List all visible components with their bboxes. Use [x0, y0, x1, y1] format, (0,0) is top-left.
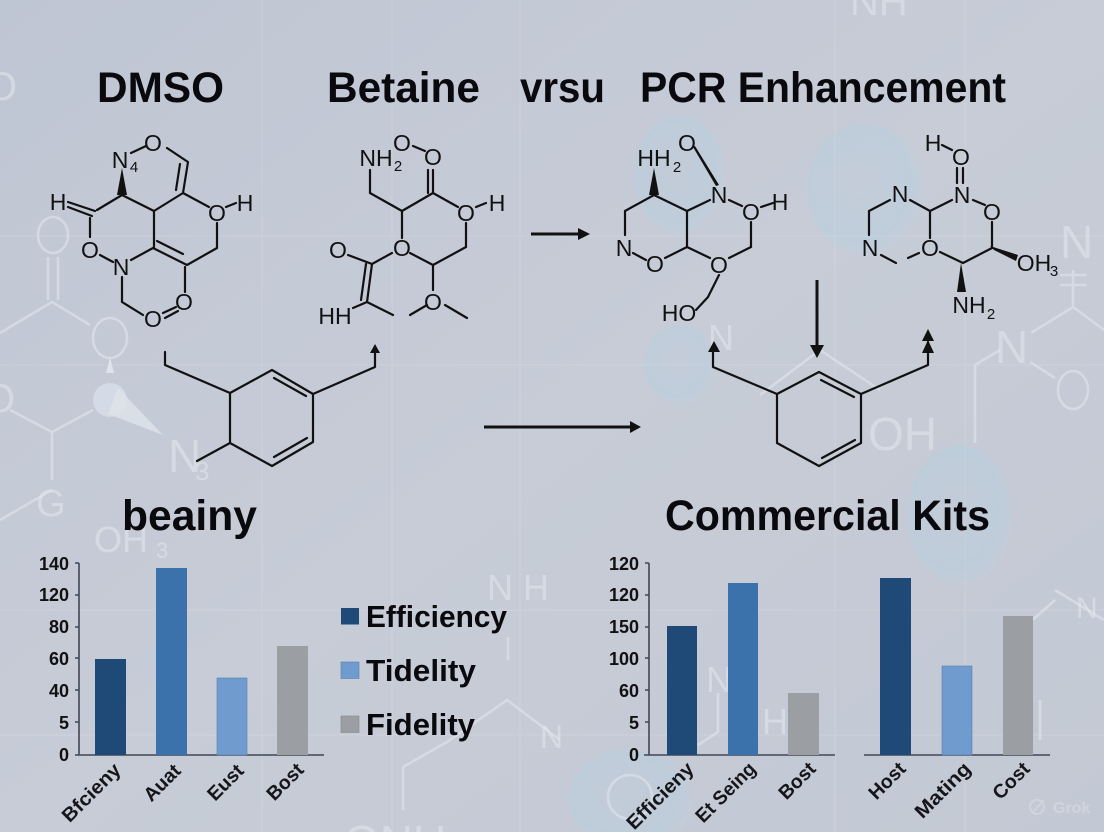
molecule: PCR structure left: N	[711, 182, 727, 208]
molecule: Betaine structure: H	[489, 190, 505, 216]
molecule: DMSO structure: O	[144, 306, 162, 332]
bar chart: beainy: 5	[59, 713, 69, 733]
molecule: PCR structure right: N	[954, 182, 970, 208]
molecule: Betaine structure: O	[393, 235, 411, 261]
background molecular motifs: OH	[868, 408, 937, 460]
bar chart: Commercial Kits left: 100	[609, 649, 639, 669]
bar chart: Commercial Kits left: 120	[609, 585, 639, 605]
bar chart: Commercial Kits right: Mating	[910, 758, 976, 823]
heading: Commercial Kits: Commercial Kits	[665, 492, 990, 540]
arrow: DMSO ring to Betaine	[165, 344, 380, 466]
molecule: PCR structure left: HH	[637, 145, 671, 171]
background molecular motifs: N	[995, 321, 1028, 373]
molecule: Betaine structure: 2	[394, 158, 402, 175]
background molecular motifs: H	[762, 701, 788, 742]
molecule: PCR structure right: O	[952, 144, 970, 170]
bar chart: beainy: 80	[49, 617, 69, 637]
molecule: PCR structure right: NH	[952, 292, 986, 318]
molecule: DMSO structure: O	[208, 200, 226, 226]
molecule: Betaine structure: NH	[359, 145, 393, 171]
molecule: PCR structure right: O	[983, 199, 1001, 225]
molecule: Betaine structure: O	[424, 289, 442, 315]
watermark: Grok	[1030, 800, 1090, 817]
molecule: Betaine structure: O	[393, 130, 411, 156]
background molecular motifs: 3	[156, 538, 168, 563]
bar chart: Commercial Kits left: Et Seing	[691, 758, 761, 827]
molecule: PCR structure left: O	[678, 130, 696, 156]
bar chart: Commercial Kits left: 120	[609, 554, 639, 574]
bar chart: beainy: 140	[39, 554, 69, 574]
molecule: PCR structure right: N	[862, 235, 878, 261]
heading: beainy: beainy	[122, 492, 257, 540]
background molecular motifs: N	[1060, 216, 1093, 268]
legend: Efficiency	[366, 599, 508, 634]
molecule: DMSO structure: 4	[130, 159, 138, 176]
arrow: reaction middle	[484, 421, 641, 433]
molecule: PCR structure right: OH	[1017, 250, 1051, 276]
background molecular motifs: N	[708, 317, 734, 358]
bar chart: beainy: Eust	[203, 760, 249, 805]
bar chart: beainy: Bost	[262, 759, 309, 805]
molecule: PCR structure left: 2	[673, 159, 681, 176]
molecule: DMSO structure: H	[237, 190, 253, 216]
molecule: DMSO structure: O	[144, 130, 162, 156]
molecule: Betaine structure: O	[457, 200, 475, 226]
molecule: DMSO structure	[50, 130, 253, 332]
molecule: Betaine structure: O	[424, 144, 442, 170]
bar chart: Commercial Kits right	[864, 578, 1050, 823]
background molecular motifs: OH	[94, 519, 148, 560]
molecule: PCR structure right: 3	[1050, 263, 1058, 280]
molecule: PCR structure left: O	[742, 199, 760, 225]
molecule: PCR structure left	[616, 130, 788, 326]
molecule: PCR structure right: O	[921, 235, 939, 261]
bar chart: Commercial Kits left	[609, 554, 835, 832]
molecule: PCR structure right: 2	[987, 306, 995, 323]
legend: Fidelity	[366, 707, 476, 742]
bar chart: Commercial Kits left: 0	[629, 745, 639, 765]
watermark: Grok: Grok	[1053, 800, 1090, 817]
molecule: Betaine structure: HH	[318, 303, 352, 329]
molecule: PCR structure left: H	[772, 189, 788, 215]
bar chart: Commercial Kits right: Cost	[988, 758, 1035, 804]
molecule: DMSO structure: H	[50, 189, 66, 215]
molecule: DMSO structure: N	[113, 254, 129, 280]
bar chart: Commercial Kits left: 5	[629, 713, 639, 733]
background molecular motifs: N	[168, 430, 201, 482]
molecule: PCR structure left: O	[646, 251, 664, 277]
bar chart: beainy: 60	[49, 649, 69, 669]
bar chart: Commercial Kits left: Bost	[774, 758, 821, 804]
molecule: PCR structure left: N	[616, 235, 632, 261]
molecule: DMSO structure: O	[81, 237, 99, 263]
arrow: reaction top	[531, 228, 590, 240]
bar chart: Commercial Kits left: 150	[609, 617, 639, 637]
molecule: PCR structure right	[862, 130, 1058, 323]
arrow: right ring with branches	[708, 329, 934, 466]
title: DMSO: DMSO	[97, 64, 224, 112]
arrow: downward to ring	[810, 280, 824, 358]
legend	[341, 599, 508, 742]
molecule: DMSO structure: O	[175, 289, 193, 315]
legend: Tidelity	[366, 653, 477, 688]
bar chart: beainy: 0	[59, 745, 69, 765]
title: vrsu: vrsu	[520, 64, 605, 112]
molecule: PCR structure right: H	[925, 130, 941, 156]
background molecular motifs: N	[540, 719, 563, 755]
molecule: PCR structure right: N	[892, 181, 908, 207]
bar chart: beainy	[39, 554, 324, 827]
bar chart: beainy: 40	[49, 681, 69, 701]
background molecular motifs: N H	[487, 567, 549, 608]
molecule: PCR structure left: O	[710, 252, 728, 278]
molecule: Betaine structure: O	[329, 237, 347, 263]
bar chart: beainy: Bfcieny	[58, 759, 126, 827]
molecule: PCR structure left: HO	[662, 300, 696, 326]
background molecular motifs: N	[706, 659, 732, 700]
bar chart: beainy: 120	[39, 585, 69, 605]
background molecular motifs: G	[36, 483, 66, 525]
bar chart: Commercial Kits left: 60	[619, 681, 639, 701]
bar chart: beainy: Auat	[139, 760, 186, 806]
title: PCR Enhancement: PCR Enhancement	[640, 64, 1006, 112]
molecule: Betaine structure	[318, 130, 505, 329]
background molecular motifs: N	[1076, 592, 1098, 625]
molecule: DMSO structure: N	[112, 147, 128, 173]
bar chart: Commercial Kits right: Host	[864, 758, 911, 804]
title: Betaine: Betaine	[327, 64, 480, 112]
background molecular motifs: 3	[195, 456, 209, 486]
